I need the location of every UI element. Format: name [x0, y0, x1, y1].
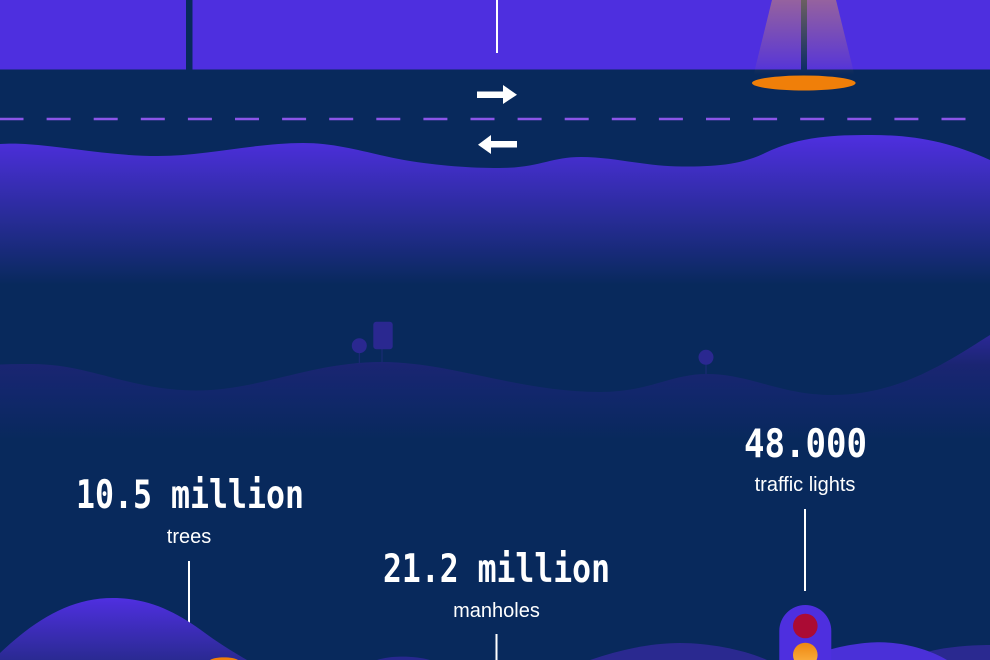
lamp light pool: [752, 76, 856, 90]
stat: manholes: [383, 547, 610, 660]
number: 48.000: 48.000: [744, 422, 867, 467]
icon: left arrow: [478, 135, 517, 154]
number: 21.2 million: 21.2 million: [383, 547, 610, 592]
label: manholes: manholes: [453, 600, 540, 622]
hill: far right: [927, 645, 990, 660]
hill: small centre: [377, 657, 430, 660]
connector line: traffic lights: [804, 509, 806, 591]
red light: [793, 614, 818, 638]
stat: traffic lights: [744, 422, 867, 591]
hill: centre right: [590, 643, 767, 660]
stat: trees: [76, 473, 304, 643]
lower wave: [0, 335, 990, 440]
amber light: [793, 643, 818, 660]
tree: round left: [352, 338, 367, 364]
icon: street lamp: [752, 0, 856, 90]
lamp light beam: [754, 0, 854, 75]
lamp pole: [801, 0, 807, 70]
label: traffic lights: traffic lights: [755, 474, 855, 496]
icon: right arrow: [477, 85, 517, 104]
connector line: manholes: [496, 634, 498, 660]
label: trees: trees: [167, 526, 211, 548]
trees on lower wave: [352, 322, 714, 376]
road centre dashed line: [0, 118, 967, 120]
tree: rectangular: [373, 322, 393, 364]
connector line: top: [496, 0, 498, 53]
traffic light housing: [779, 605, 831, 660]
hill: bottom left: [0, 598, 247, 660]
icon: traffic light: [779, 605, 831, 660]
number: 10.5 million: 10.5 million: [76, 473, 304, 518]
upper wave: [0, 135, 990, 290]
connector line: trees: [188, 561, 190, 643]
panel: top purple band: [0, 0, 990, 70]
hill: right of traffic light: [825, 642, 947, 660]
icon: orange manhole top: [210, 657, 238, 660]
tree: round right: [698, 350, 714, 376]
